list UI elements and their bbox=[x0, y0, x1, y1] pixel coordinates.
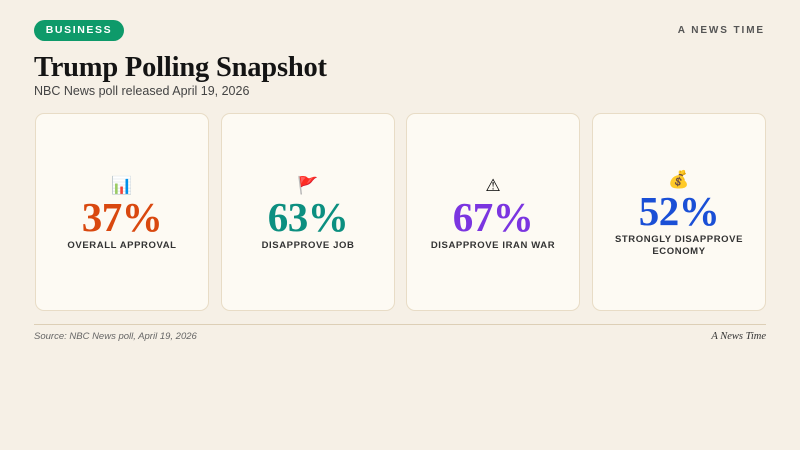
signature: A News Time bbox=[711, 331, 766, 342]
stat: 37% bbox=[82, 194, 162, 240]
stat: 67% bbox=[453, 194, 533, 240]
panel: iran war bbox=[406, 113, 580, 311]
panel: economy bbox=[592, 113, 766, 311]
brand: A NEWS TIME bbox=[678, 25, 765, 36]
label: DISAPPROVE JOB bbox=[262, 240, 354, 251]
label: OVERALL APPROVAL bbox=[67, 240, 177, 251]
title: Trump Polling Snapshot bbox=[34, 52, 327, 83]
icon: warning: ⚠ bbox=[485, 176, 501, 195]
label bbox=[615, 234, 743, 257]
icon: money bag: 💰 bbox=[668, 170, 690, 189]
label: STRONGLY DISAPPROVE bbox=[615, 234, 743, 245]
stat: 52% bbox=[639, 188, 719, 234]
source: Source: NBC News poll, April 19, 2026 bbox=[34, 331, 197, 342]
icon: chart: 📊 bbox=[111, 176, 133, 195]
subtitle: NBC News poll released April 19, 2026 bbox=[34, 84, 249, 98]
label: ECONOMY bbox=[652, 246, 706, 257]
tag: business bbox=[34, 20, 124, 41]
icon: flag: 🚩 bbox=[297, 176, 319, 195]
label: DISAPPROVE IRAN WAR bbox=[431, 240, 555, 251]
tag: business: BUSINESS bbox=[46, 24, 112, 36]
stat: 63% bbox=[268, 194, 348, 240]
panel: overall approval bbox=[35, 113, 209, 311]
panel: disapprove job bbox=[221, 113, 395, 311]
